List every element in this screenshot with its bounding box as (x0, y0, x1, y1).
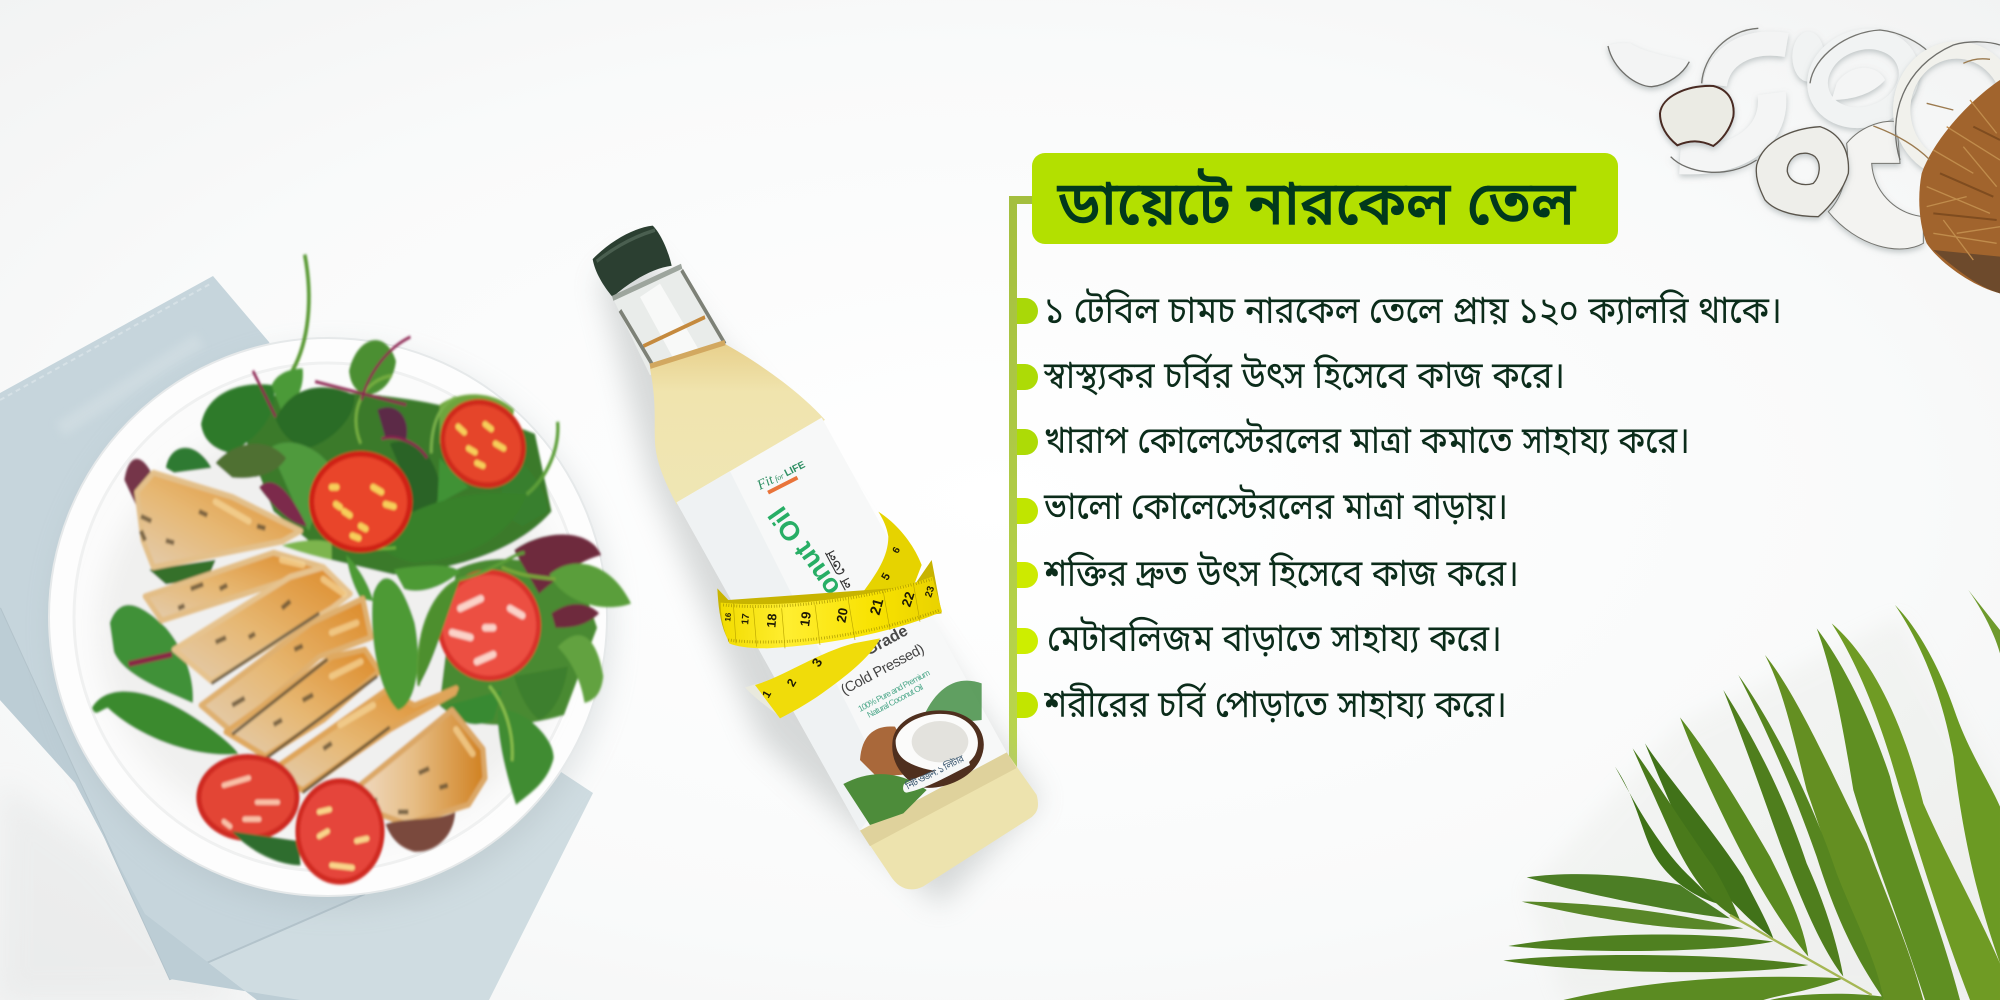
title banner (1032, 153, 1618, 244)
oil upper liquid (650, 344, 825, 505)
label grade: Virgin Grade (818, 622, 911, 682)
item 6: মেটাবলিজম বাড়াতে সাহায্য করে। (1047, 616, 1502, 660)
chip: lower crescent (1828, 121, 1923, 249)
item 4: ভালো কোলেস্টেরলের মাত্রা বাড়ায়। (1043, 484, 1508, 528)
label purity text: 100% Pure and Premium (856, 667, 932, 714)
leaf shadow (1527, 617, 2000, 1000)
salad and chicken (92, 255, 631, 885)
label purity text: Natural Coconut Oil (865, 682, 925, 720)
tape main band: 20 (834, 607, 851, 624)
fronds (1503, 590, 2000, 1000)
label cold pressed: (Cold Pressed) (838, 641, 927, 699)
shadow below the food (100, 414, 564, 841)
label bangla name: ল তেল (821, 546, 857, 593)
chip: large broken ring (1671, 28, 1824, 172)
item 7: শরীরের চর্বি পোড়াতে সাহায্য করে। (1043, 681, 1507, 726)
leaf group: salad greens (92, 255, 631, 805)
coconut chips (1607, 26, 2000, 293)
tomatoes (196, 385, 541, 885)
palm leaf (1503, 590, 2000, 1000)
label coconut art (843, 681, 984, 825)
tape main band: 23 (923, 584, 937, 599)
title banner: ডায়েটে নারকেল তেল (1057, 170, 1576, 237)
item 3: খারাপ কোলেস্টেরলের মাত্রা কমাতে সাহায্য করে। (1044, 418, 1690, 462)
label (677, 418, 1007, 831)
napkin (0, 276, 593, 1000)
label logo: Fit for LIFE (754, 457, 808, 494)
chip: round ring (1756, 127, 1849, 217)
tape rear edge (717, 560, 942, 643)
tape main band: 16 (723, 612, 733, 622)
tape main band: 18 (764, 613, 780, 628)
tape main band: 17 (740, 613, 752, 625)
coconut oil bottle (593, 226, 1040, 905)
chip: brown skinned blob (1660, 86, 1734, 146)
tape upper strap: 5 (880, 571, 893, 583)
tape lower strap: 1 (761, 689, 774, 700)
item 5: শক্তির দ্রুত উৎস হিসেবে কাজ করে। (1043, 551, 1519, 595)
tape lower strap: 2 (784, 676, 799, 689)
item 1: ১ টেবিল চামচ নারকেল তেলে প্রায় ১২০ ক্যালরি থাকে। (1044, 288, 1782, 332)
tape upper strap: 6 (891, 545, 903, 556)
front greens (372, 553, 524, 710)
whole coconut (1873, 59, 2000, 293)
chicken slices (137, 473, 485, 824)
cap (593, 226, 672, 297)
tape main band: 21 (868, 597, 887, 617)
oil lower liquid (860, 752, 1038, 889)
measuring tape (717, 512, 942, 718)
chip: right ring (1896, 42, 2000, 170)
tape main band (721, 577, 942, 648)
benefit list (1017, 288, 1782, 726)
glass neck (613, 267, 727, 375)
tape lower strap: 3 (809, 655, 825, 669)
label product name: onut Oil (763, 501, 846, 602)
connector line (1013, 200, 1034, 820)
label net weight: নিট ওজন: ১ লিটার (903, 752, 966, 793)
chip: top ring (1806, 26, 1928, 130)
bottle shadow (600, 250, 1040, 905)
plate (49, 338, 613, 908)
item 2: স্বাস্থ্যকর চর্বির উৎস হিসেবে কাজ করে। (1043, 352, 1565, 397)
tape main band: 22 (899, 590, 917, 609)
tape main band: 19 (797, 611, 814, 627)
tape upper strap (863, 512, 922, 592)
tape lower strap (745, 638, 880, 718)
chip: top crescent (1607, 43, 1689, 87)
